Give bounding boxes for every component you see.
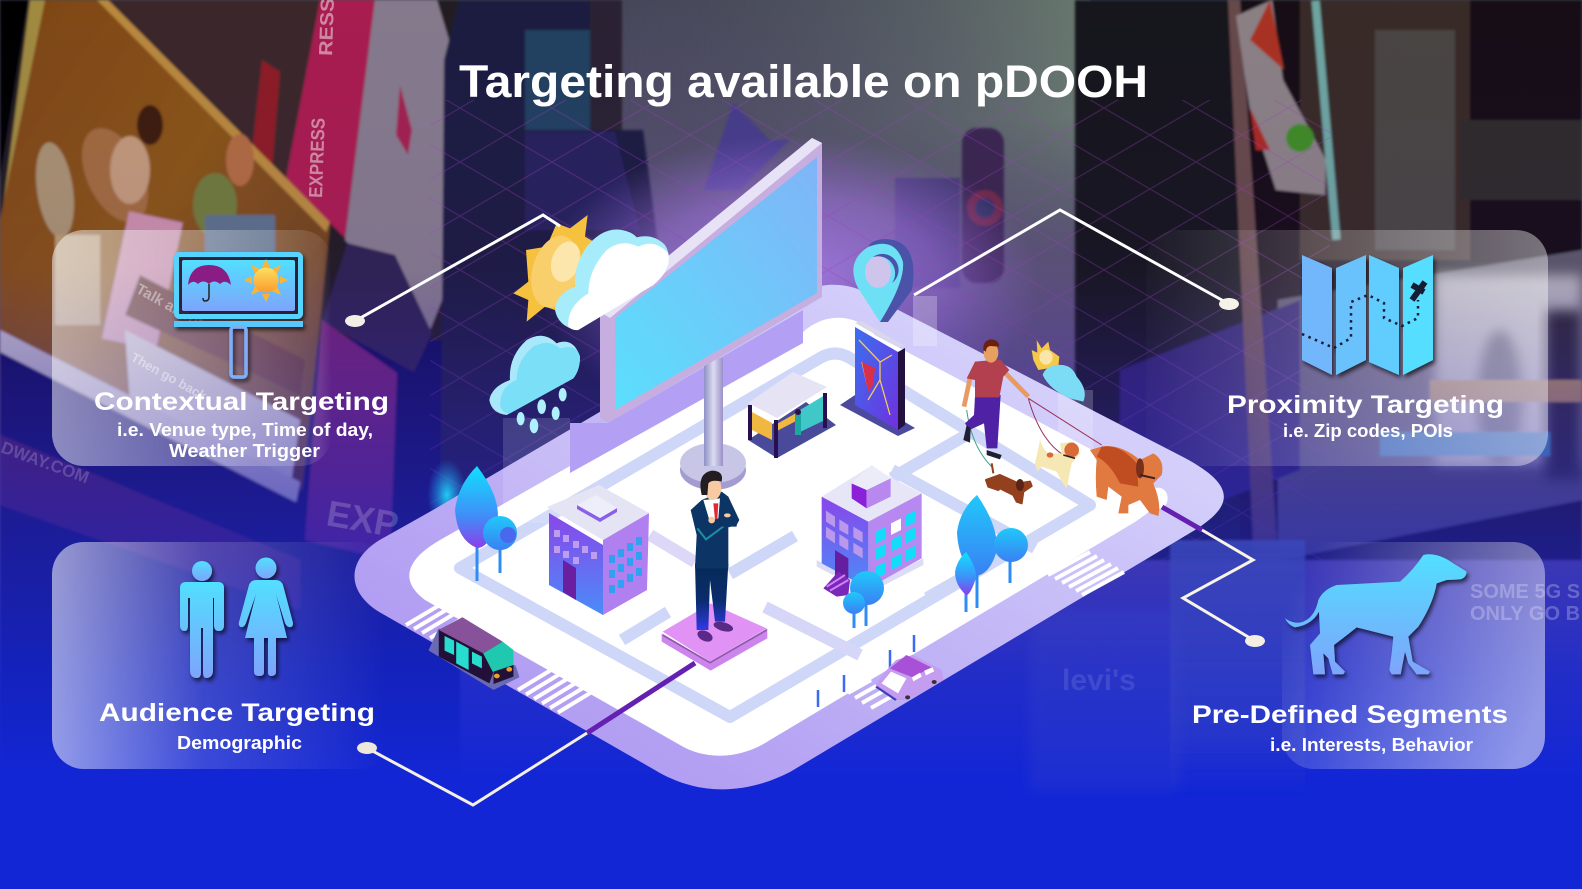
icon: location pin — [853, 239, 913, 322]
man walking dogs — [963, 339, 1168, 516]
map x marker — [1412, 282, 1425, 300]
trees — [455, 466, 1028, 628]
light beams — [503, 418, 570, 523]
background signage text: Then go back — [129, 350, 210, 404]
isometric city platform — [354, 285, 1224, 789]
background signage text: RESS — [316, 0, 339, 56]
pedestal — [662, 603, 767, 671]
map board — [840, 321, 915, 436]
woman — [239, 558, 293, 676]
connector: contextual targeting — [345, 215, 560, 327]
connector: pre-defined segments — [1162, 507, 1265, 647]
heading: audience targeting: Audience Targeting — [99, 699, 375, 727]
icon: small sun and cloud — [1032, 340, 1085, 402]
panel: audience targeting — [52, 542, 390, 769]
billboard pole — [680, 358, 746, 490]
roads — [460, 354, 1090, 717]
billboard frame — [600, 138, 822, 423]
icon: sun behind cloud — [513, 215, 669, 330]
big dog — [1090, 446, 1168, 516]
panel: proximity targeting — [1146, 230, 1548, 466]
billboard — [600, 138, 822, 490]
panel: pre-defined segments — [1282, 542, 1545, 769]
leashes — [967, 398, 1102, 467]
building right windows — [826, 511, 863, 558]
bus — [430, 617, 518, 688]
dachshund — [986, 463, 1032, 503]
building right — [817, 465, 923, 597]
icon: billboard with umbrella and sun — [174, 254, 303, 377]
text: audience details: Demographic — [177, 733, 302, 753]
map route — [1302, 295, 1418, 348]
terrier — [1035, 440, 1080, 488]
icon: man and woman — [180, 558, 293, 678]
umbrella — [188, 265, 231, 301]
walker — [963, 339, 1028, 459]
background signage text: SOME 5G S — [1470, 581, 1580, 603]
car — [875, 655, 944, 700]
text: proximity details: i.e. Zip codes, POIs — [1283, 421, 1453, 441]
connector: audience targeting — [357, 663, 695, 805]
people on billboard — [30, 140, 80, 240]
icon: white cloud — [555, 230, 669, 330]
background signage text: levi's — [1062, 664, 1136, 697]
heading: proximity targeting: Proximity Targeting — [1227, 391, 1504, 419]
building left — [547, 485, 649, 615]
background signage text: ONLY GO B — [1470, 603, 1580, 625]
man — [180, 561, 224, 678]
background signage text: EXPRESS — [306, 117, 330, 198]
panel: contextual targeting — [52, 230, 332, 466]
sun — [244, 259, 288, 302]
billboard screen — [615, 157, 817, 410]
text: contextual details: Weather Trigger — [169, 441, 320, 461]
man in suit on pedestal — [662, 471, 767, 671]
icon: rain cloud — [489, 336, 580, 433]
connector: proximity targeting — [914, 210, 1239, 310]
title: Targeting available on pDOOH — [459, 56, 1148, 107]
building left windows — [554, 530, 597, 564]
background signage text: Talk about — [133, 281, 206, 331]
billboard shadow — [570, 310, 803, 473]
background signage text: EXP — [324, 493, 402, 545]
small street poles — [818, 635, 914, 707]
bus shelter — [748, 372, 836, 458]
rain drops — [517, 388, 567, 433]
icon: dog silhouette — [1285, 554, 1467, 674]
background signage text: DWAY.COM — [0, 438, 92, 487]
text: pre-defined details: i.e. Interests, Behavior — [1270, 735, 1473, 755]
text: contextual details: i.e. Venue type, Time of day, — [117, 420, 373, 440]
heading: contextual targeting: Contextual Targeting — [94, 388, 389, 416]
crosswalks — [406, 552, 1124, 712]
platform white surface — [409, 318, 1159, 756]
background signage text — [0, 0, 1580, 697]
heading: pre-defined segments: Pre-Defined Segments — [1192, 701, 1508, 729]
text: contextual details — [117, 420, 373, 461]
icon: folded map — [1302, 255, 1433, 375]
